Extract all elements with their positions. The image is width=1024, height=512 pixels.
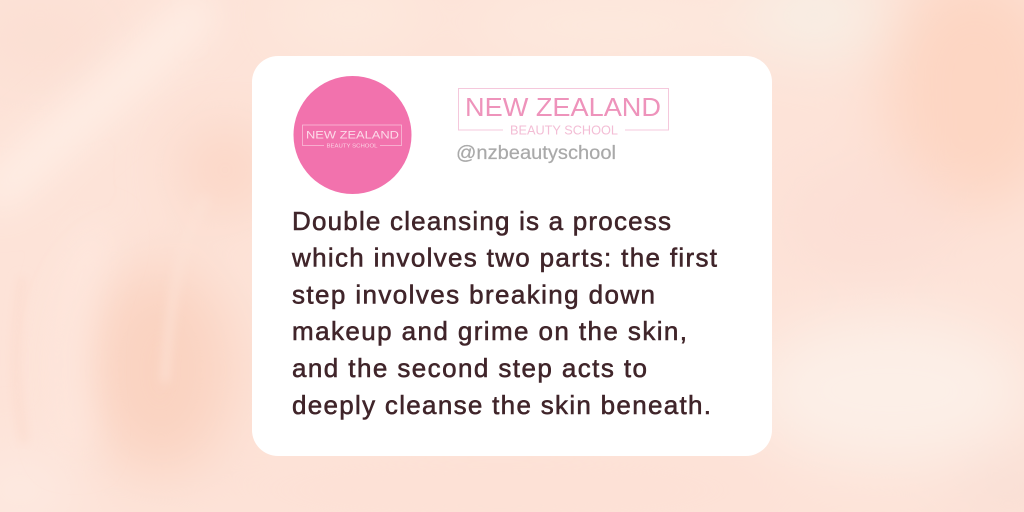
logo: pink circle badge: NEW ZEALAND	[306, 130, 399, 142]
panel: white card	[252, 56, 772, 456]
text block: double cleansing description: which involves two parts: the first	[291, 242, 718, 272]
handle: @nzbeautyschool: @nzbeautyschool	[456, 143, 616, 164]
text block: double cleansing description: makeup and grime on the skin,	[292, 316, 687, 346]
text block: double cleansing description: Double cleansing is a process	[292, 206, 671, 236]
text block: double cleansing description: deeply cleanse the skin beneath.	[292, 390, 711, 420]
text block: double cleansing description	[291, 206, 718, 420]
logo: New Zealand Beauty School wordmark	[458, 88, 668, 138]
text block: double cleansing description: step involves breaking down	[292, 280, 655, 310]
logo: New Zealand Beauty School wordmark: BEAUTY SCHOOL	[510, 124, 618, 138]
logo: New Zealand Beauty School wordmark: NEW ZEALAND	[465, 92, 661, 122]
text block: double cleansing description: and the second step acts to	[292, 353, 647, 383]
logo: pink circle badge: BEAUTY SCHOOL	[326, 144, 378, 150]
logo: pink circle badge	[294, 76, 412, 194]
